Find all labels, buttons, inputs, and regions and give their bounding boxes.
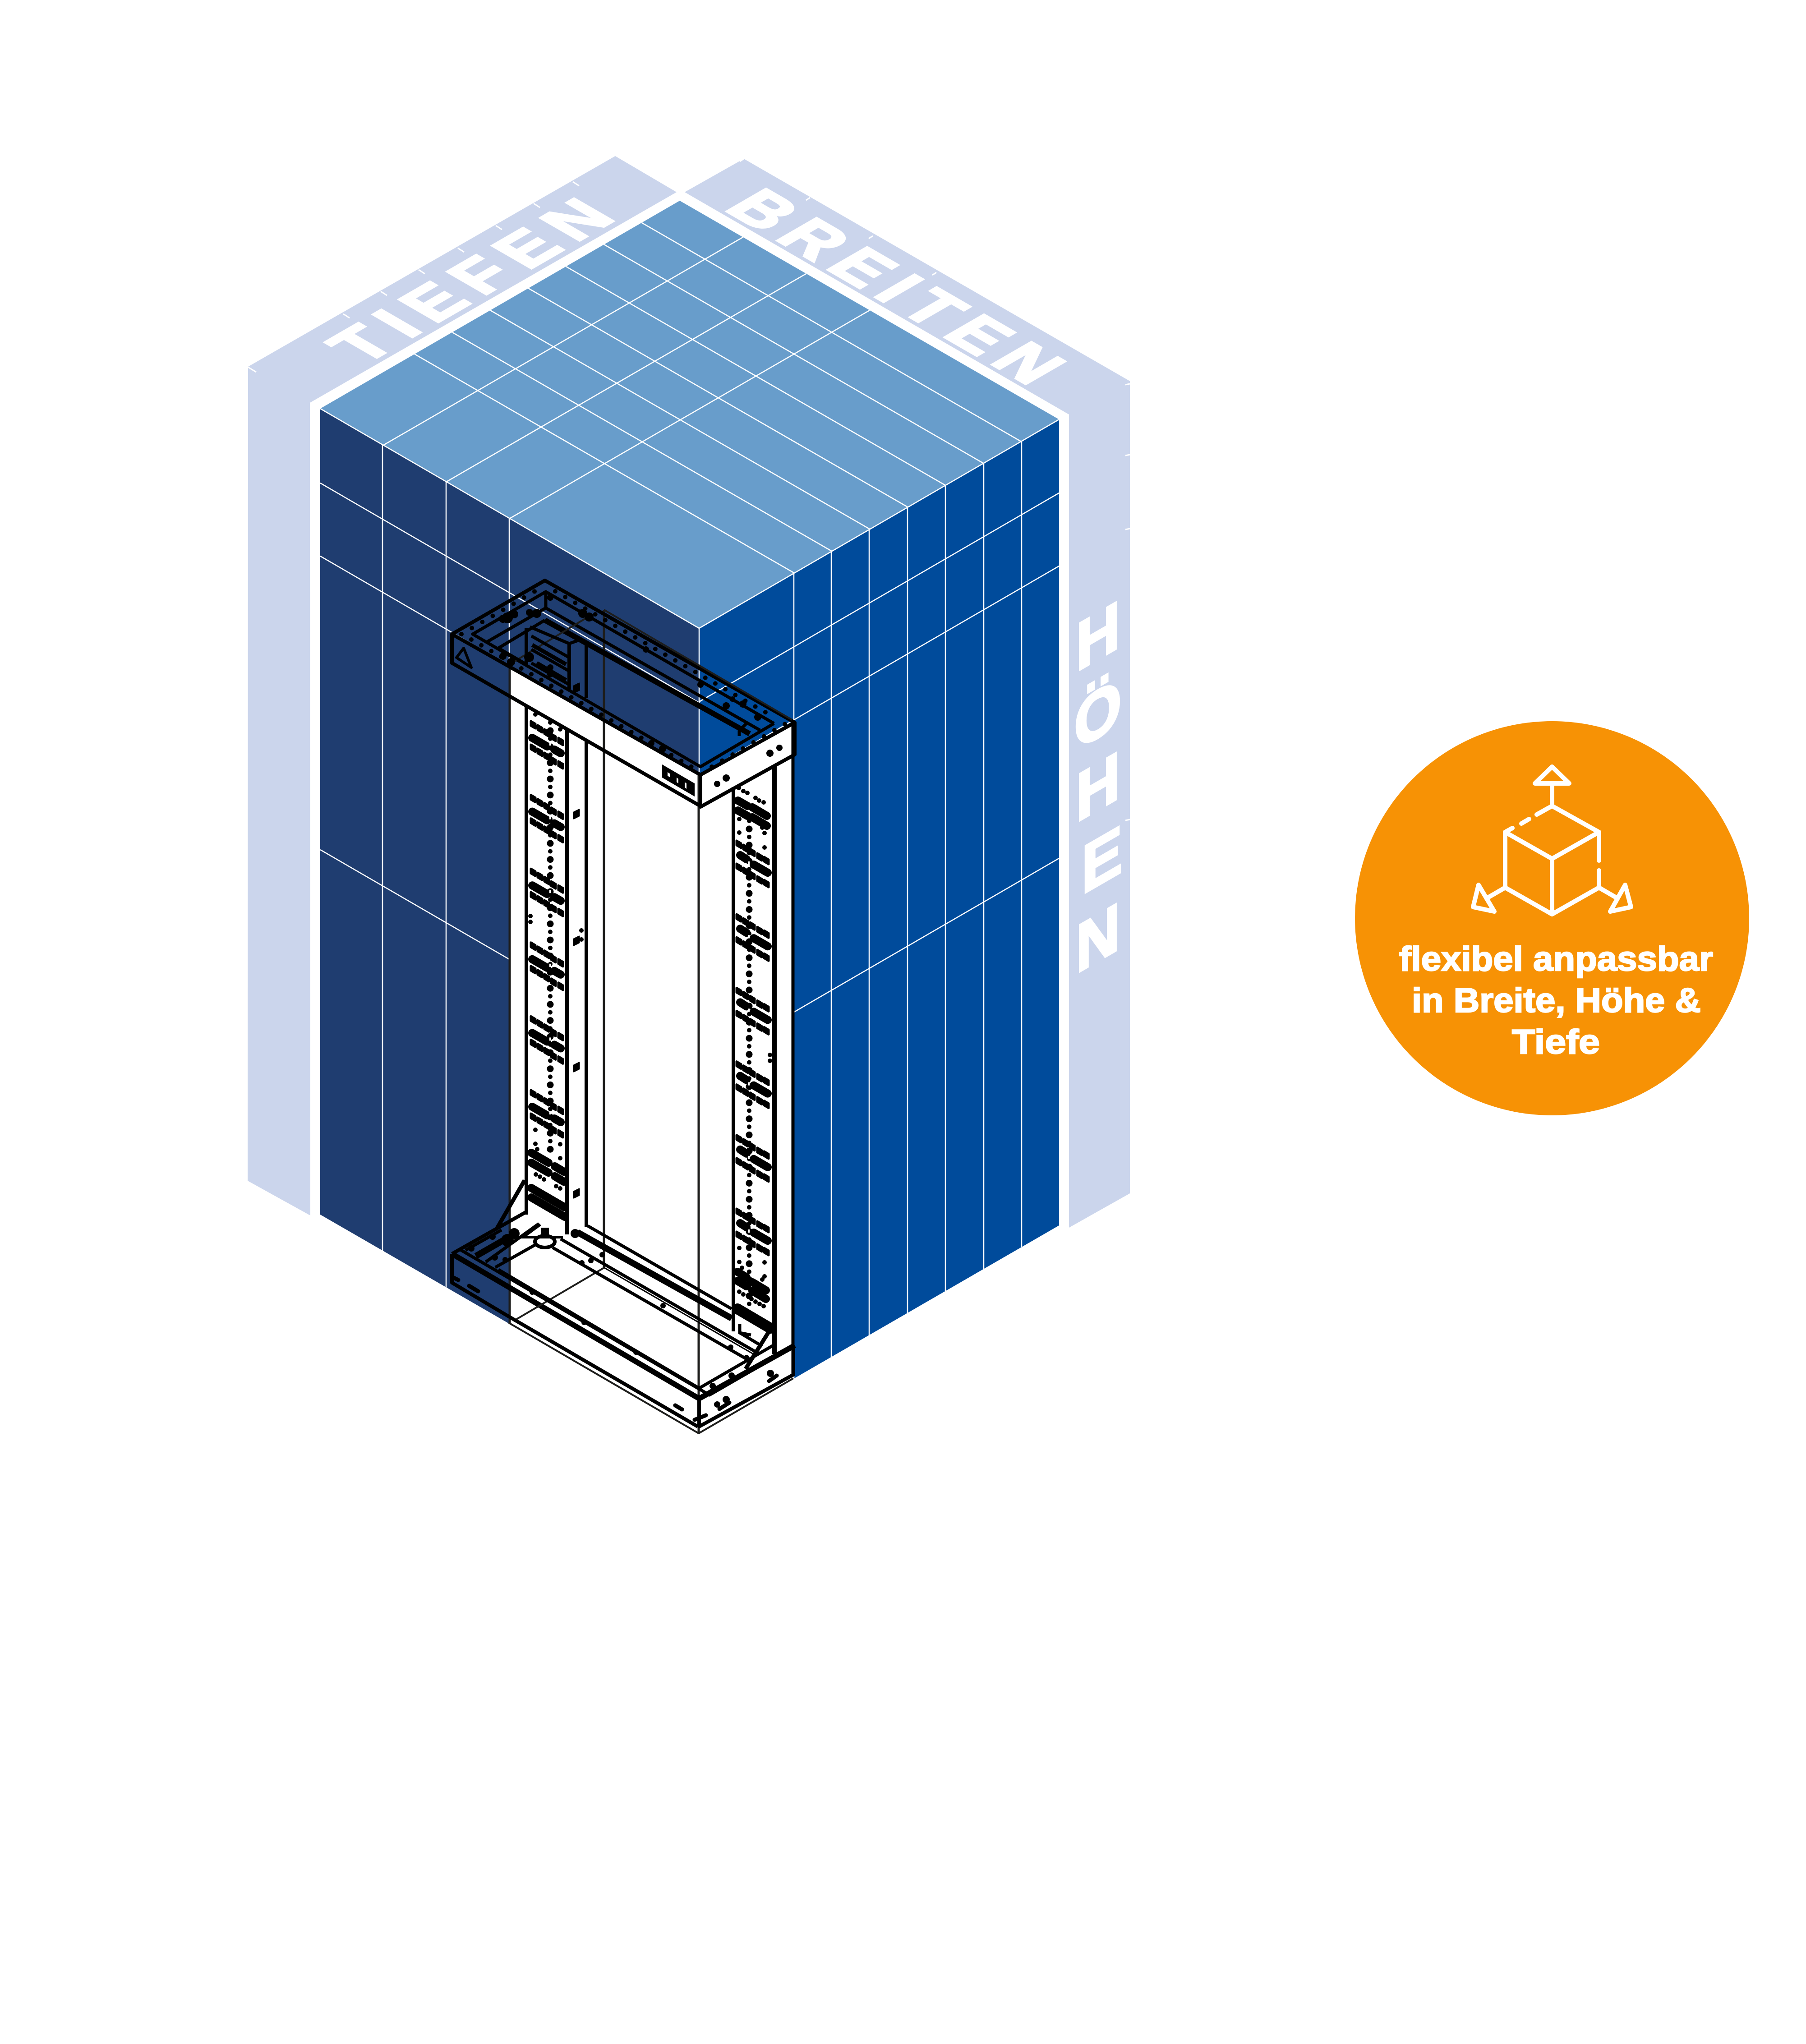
label: HÖHEN: N bbox=[1076, 888, 1120, 989]
left face bbox=[320, 409, 699, 1433]
rack uprights bbox=[510, 610, 793, 1433]
panel: depth band with label TIEFEN bbox=[248, 156, 677, 1215]
right rail perforation bbox=[737, 786, 772, 1346]
badge text bbox=[1399, 940, 1713, 1061]
label: HÖHEN: Ö bbox=[1074, 663, 1121, 766]
right face bbox=[699, 419, 1059, 1433]
icon: cube with three arrows bbox=[1473, 767, 1631, 914]
badge text: in Breite, Höhe & bbox=[1412, 981, 1701, 1020]
badge text: flexibel anpassbar bbox=[1399, 940, 1713, 978]
panel: width and height band with labels BREITEN and HÖHEN bbox=[685, 159, 1130, 1228]
bottom frame slots bbox=[453, 1277, 777, 1420]
label: HÖHEN: E bbox=[1082, 811, 1122, 909]
rating plate bbox=[662, 764, 695, 796]
panel: configuration block bbox=[320, 201, 1059, 1433]
left rail perforation bbox=[528, 683, 584, 1217]
label: HÖHEN bbox=[1074, 586, 1122, 989]
frame bolt holes bbox=[461, 585, 545, 634]
bottom frame bbox=[452, 1180, 795, 1433]
badge: orange circle bbox=[1355, 721, 1749, 1115]
badge text: Tiefe bbox=[1512, 1023, 1600, 1061]
label: BREITEN: BREITEN bbox=[711, 180, 1091, 399]
top face bbox=[320, 201, 1059, 628]
label: TIEFEN: TIEFEN bbox=[312, 183, 639, 373]
warning triangle marking bbox=[456, 648, 471, 668]
rack white body bbox=[510, 667, 793, 1433]
illustration: open rack frame bbox=[452, 580, 795, 1433]
levelling foot bbox=[535, 1236, 555, 1248]
label: HÖHEN: H bbox=[1076, 586, 1120, 687]
top frame bbox=[452, 580, 795, 807]
label: HÖHEN: H bbox=[1076, 737, 1120, 838]
diagonal braces bbox=[497, 1180, 771, 1369]
